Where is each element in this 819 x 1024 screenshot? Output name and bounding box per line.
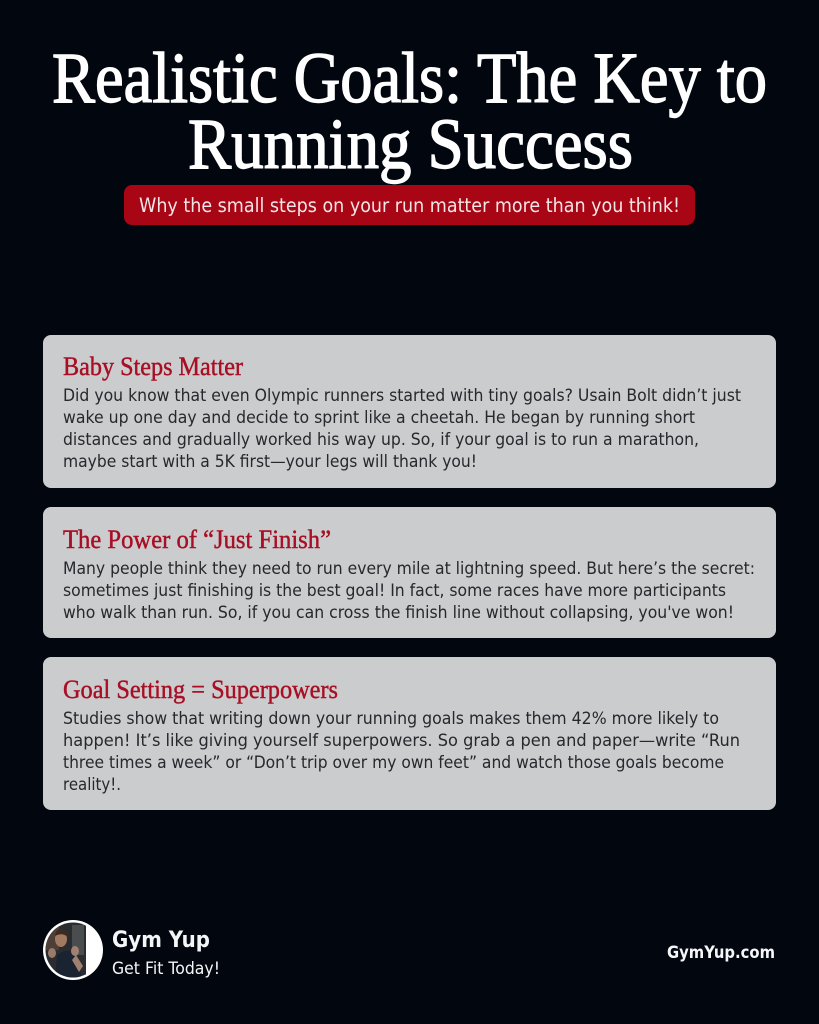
- footer: brand: [43, 920, 220, 980]
- title: Running Success: [188, 104, 633, 184]
- panel: goal setting superpowers: [43, 657, 776, 810]
- panel: the power of just finish: [43, 507, 776, 638]
- text block: goal setting superpowers: three times a week” or “Don’t trip over my own feet” and watch those goals become: [63, 753, 724, 772]
- text block: baby steps matter: distances and gradually worked his way up. So, if your goal is to run a marathon,: [63, 430, 699, 449]
- text block: the power of just finish: Many people think they need to run every mile at lightning speed. But here’s the secret:: [63, 559, 755, 578]
- text block: goal setting superpowers: happen! It’s like giving yourself superpowers. So grab a pen and paper—write “Run: [63, 731, 740, 750]
- title: [52, 38, 767, 184]
- text block: baby steps matter: maybe start with a 5K first—your legs will thank you!: [63, 452, 477, 471]
- text block: baby steps matter: Did you know that even Olympic runners started with tiny goals? Usain Bolt didn’t just: [63, 386, 741, 405]
- heading: goal setting superpowers: Goal Setting = Superpowers: [63, 674, 338, 704]
- text block: the power of just finish: who walk than run. So, if you can cross the finish line without collapsing, you've won!: [63, 603, 734, 622]
- panel: baby steps matter: [43, 335, 776, 488]
- text block: baby steps matter: [63, 386, 741, 471]
- icon: profile avatar: [43, 920, 103, 980]
- text block: goal setting superpowers: [63, 709, 740, 794]
- heading: the power of just finish: The Power of “Just Finish”: [63, 524, 331, 554]
- heading: baby steps matter: Baby Steps Matter: [63, 351, 243, 381]
- text block: goal setting superpowers: Studies show that writing down your running goals makes them 42% more likely to: [63, 709, 719, 728]
- text block: goal setting superpowers: reality!.: [63, 775, 121, 794]
- text block: the power of just finish: [63, 559, 755, 622]
- tagline: Get Fit Today!: [112, 959, 220, 979]
- subtitle banner: [124, 185, 695, 225]
- footer: website: GymYup.com: [667, 943, 775, 962]
- subtitle banner: Why the small steps on your run matter more than you think!: [139, 194, 680, 217]
- text block: the power of just finish: sometimes just finishing is the best goal! In fact, some races have more participants: [63, 581, 726, 600]
- brand name: Gym Yup: [112, 927, 210, 953]
- text block: baby steps matter: wake up one day and decide to sprint like a cheetah. He began by running short: [63, 408, 695, 427]
